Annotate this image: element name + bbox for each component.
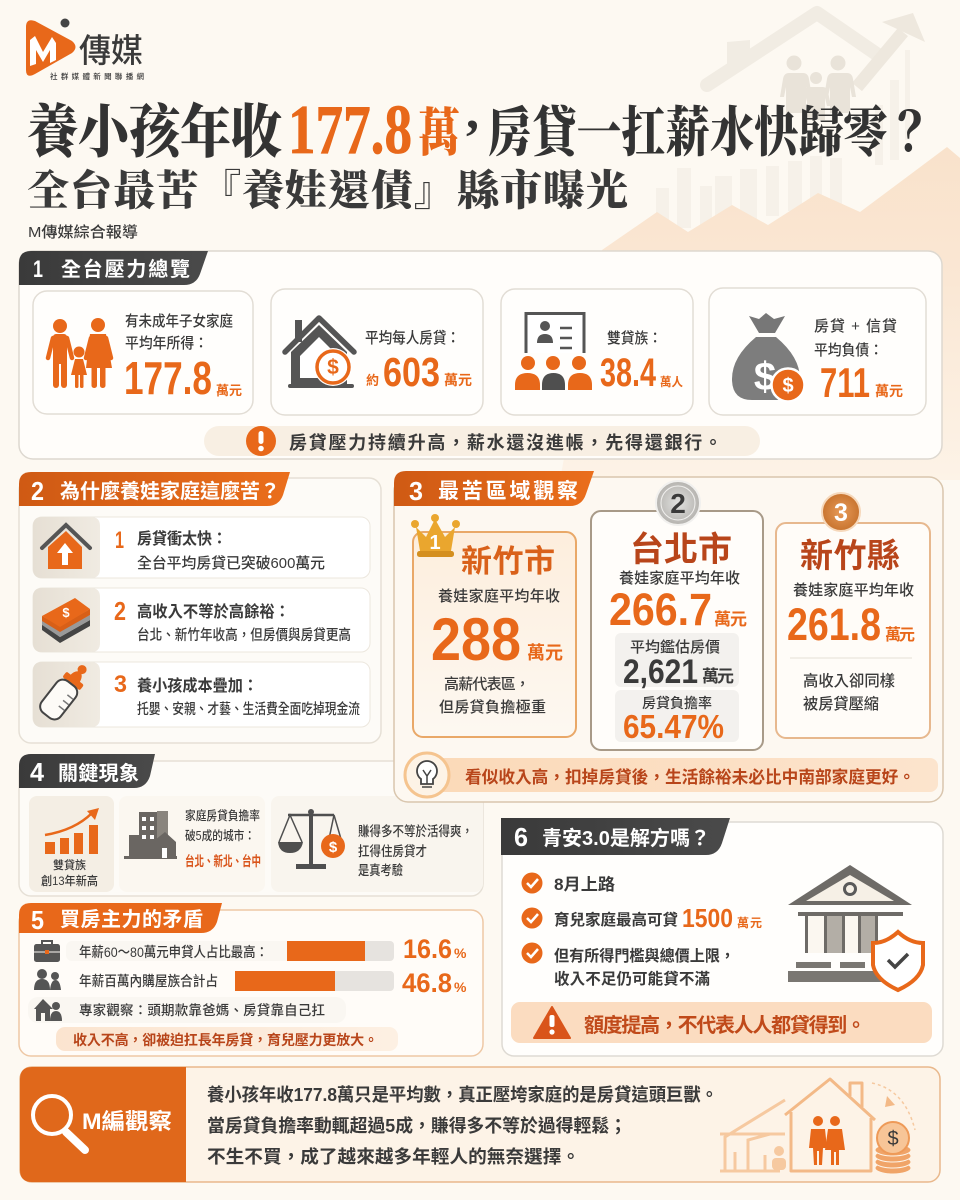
- stat text: 平均負債：: [814, 342, 883, 359]
- panel 3: 最苦區域觀察: [394, 471, 943, 802]
- title: 養小孩年收: [27, 100, 282, 165]
- panel 6: 青安3.0是解方嗎: [501, 818, 943, 1056]
- stat card: total debt: [709, 288, 926, 415]
- heading 2: [19, 472, 290, 506]
- phenomenon: burden over 50%: 破5成的城市：: [185, 828, 255, 843]
- rank 1: 新竹市: 新竹市: [461, 544, 555, 579]
- average appraised price: 萬元: [702, 667, 734, 686]
- icon: rising bars: [45, 808, 99, 854]
- panel 4: 關鍵現象: [19, 754, 483, 896]
- rank 3: 新竹縣: 261.8: [787, 599, 881, 650]
- reason 2: [33, 588, 370, 652]
- label block with magnifier: [20, 1067, 186, 1182]
- checklist: 8月上路: [554, 875, 616, 894]
- reason 1: 房貸衝太快：: [137, 529, 227, 548]
- stat text: [600, 330, 683, 395]
- statistic row: 46.8%: 年薪百萬內購屋族合計占: [79, 973, 218, 989]
- mortgage burden rate: 房貸負擔率: [642, 695, 712, 711]
- statistic row: 16.6%: 16.6: [403, 934, 452, 964]
- rank 3: 新竹縣: 高收入卻同樣: [803, 672, 895, 690]
- icon: money bag: $: [782, 375, 794, 397]
- rank 2: 台北市: 萬元: [714, 610, 747, 629]
- statistic row: 46.8%: [34, 968, 467, 998]
- rank 3: 新竹縣: 養娃家庭平均年收: [793, 581, 914, 599]
- stat text: 雙貸族：: [607, 330, 662, 347]
- checklist: 育兒家庭最高可貸: [554, 910, 678, 929]
- statistic row: 16.6%: [34, 934, 467, 964]
- stat card: mortgage per person: [271, 289, 483, 415]
- heading 1: 1: [33, 256, 43, 283]
- commentary text: 不生不買，成了越來越多年輕人的無奈選擇。: [207, 1146, 580, 1167]
- title: 萬: [418, 105, 460, 163]
- reason 1: 全台平均房貸已突破600萬元: [137, 554, 325, 572]
- stat text: 平均年所得：: [125, 335, 208, 352]
- icon: board and people: [515, 314, 592, 390]
- rank 3: 新竹縣: [776, 493, 930, 738]
- phenomenon: burden over 50%: [119, 796, 265, 892]
- heading 2: 2: [31, 476, 44, 506]
- callout: lightbulb note: [405, 753, 938, 797]
- icon: baby bottle: [37, 659, 94, 723]
- rank 3: 新竹縣: 新竹縣: [800, 537, 900, 574]
- stat text: 平均每人房貸：: [365, 329, 460, 347]
- stat text: 萬元: [216, 383, 242, 398]
- stat text: [365, 329, 472, 395]
- logo: M傳媒: 傳媒: [79, 32, 143, 69]
- rank 1: 新竹市: 但房貸負擔極重: [439, 699, 546, 716]
- heading 4: 4: [30, 757, 45, 787]
- phenomenon: burden over 50%: 台北、新北、台中: [185, 853, 261, 869]
- icon: silver medal: [656, 481, 700, 525]
- rank 1: 新竹市: 高薪代表區，: [444, 675, 530, 693]
- subtitle: 全台最苦『養娃還債』縣市曝光: [27, 167, 628, 215]
- stat text: 萬人: [660, 375, 683, 389]
- phenomenon: dual-loan record: [29, 796, 114, 892]
- heading 5: 5: [31, 905, 44, 935]
- stat text: 萬元: [444, 372, 472, 388]
- icon: house with up arrow: [42, 525, 90, 569]
- icon: balance scale with coin: [278, 809, 345, 869]
- heading 6: 青安3.0是解方嗎？: [542, 826, 710, 850]
- title: ,: [466, 83, 479, 140]
- checklist: 收入不足仍可能貸不滿: [554, 969, 710, 988]
- icon: silver medal: 2: [670, 488, 686, 519]
- rank 3: 新竹縣: 萬元: [885, 626, 915, 644]
- stat text: 有未成年子女家庭: [125, 312, 233, 330]
- icon: bank with shield: [788, 865, 923, 990]
- icon: stack of cash: [42, 598, 90, 643]
- panel 5: 買房主力的矛盾: [19, 903, 483, 1056]
- icon: gold crown: 1: [429, 532, 441, 554]
- icon: city buildings: [124, 811, 177, 859]
- background illustration: house, family, rising arrow and chart: [560, 13, 960, 480]
- statistic row: 16.6%: 年薪60～80萬元申貸人占比最高：: [79, 944, 268, 960]
- rank 3: 新竹縣: 被房貸壓縮: [803, 695, 879, 713]
- label block with magnifier: M編觀察: [82, 1109, 172, 1134]
- callout: child-rearing pressure: [56, 1027, 398, 1051]
- icon: two people: [34, 969, 61, 990]
- checklist: 但有所得門檻與總價上限，: [554, 946, 735, 965]
- stat text: 603: [383, 349, 440, 395]
- mortgage burden rate: 65.47%: [623, 708, 724, 745]
- icon: balance scale with coin: $: [329, 839, 338, 856]
- expert note row: [28, 997, 346, 1023]
- phenomenon: burden over 50%: 家庭房貸負擔率: [185, 808, 260, 823]
- heading 1: 全台壓力總覽: [61, 257, 190, 281]
- stat text: 38.4: [600, 351, 657, 395]
- icon: house with coin: $: [327, 356, 339, 379]
- reason 3: 養小孩成本疊加：: [137, 676, 258, 695]
- callout: child-rearing pressure: 收入不高，卻被迫扛長年房貸，育兒壓力更放大。: [73, 1032, 378, 1048]
- panel 2: 為什麼養娃家庭這麼苦: [19, 472, 381, 743]
- logo: M傳媒: 社群媒體新聞聯播網: [50, 71, 144, 81]
- title: 177.8: [288, 92, 412, 169]
- phenomenon: earnings vs life: 扛得住房貸才: [358, 843, 427, 859]
- stat card: family income: [33, 291, 253, 414]
- checklist: 萬元: [737, 916, 762, 930]
- checklist: [522, 872, 762, 988]
- callout: mortgage pressure: [204, 426, 760, 456]
- icon: bronze medal: [822, 493, 860, 531]
- statistic row: 46.8%: 46.8: [402, 968, 452, 998]
- callout: lightbulb note: 看似收入高，扣掉房貸後，生活餘裕未必比中南部家庭更好。: [465, 767, 915, 787]
- rank 2: 台北市: 養娃家庭平均年收: [619, 569, 740, 587]
- statistic row: 46.8%: %: [454, 979, 467, 995]
- average appraised price: 2,621: [623, 653, 698, 691]
- icon: money bag: $: [754, 355, 776, 399]
- panel 1: 全台壓力總覽: [19, 251, 942, 459]
- phenomenon: earnings vs life: 是真考驗: [358, 862, 403, 878]
- rank 2: 台北市: 266.7: [609, 584, 712, 635]
- checklist: 1500: [682, 903, 733, 933]
- rank 1: 新竹市: [411, 514, 576, 737]
- reason 2: 台北、新竹年收高，但房價與房貸更高: [137, 626, 351, 644]
- heading 4: [19, 754, 155, 788]
- reason 1: 1: [115, 527, 124, 554]
- stat text: 711: [820, 359, 870, 406]
- expert note row: 專家觀察：頭期款靠爸媽、房貸靠自己扛: [79, 1002, 325, 1018]
- stat text: [124, 312, 242, 404]
- icon: briefcase: [34, 941, 60, 962]
- rank 1: 新竹市: 288: [431, 606, 521, 673]
- statistic row: 16.6%: %: [454, 945, 467, 961]
- heading 6: [501, 818, 730, 855]
- stat card: dual-loan group: [501, 289, 693, 415]
- reason 3: 3: [114, 671, 127, 698]
- phenomenon: earnings vs life: [271, 796, 483, 892]
- reason 2: 高收入不等於高餘裕：: [137, 602, 290, 621]
- heading 3: [394, 471, 594, 506]
- stat text: 房貸 + 信貸: [814, 318, 897, 335]
- panel: M編觀察: [20, 1067, 940, 1182]
- icon: stack of cash: $: [62, 605, 70, 620]
- reason 3: 托嬰、安親、才藝、生活費全面吃掉現金流: [137, 700, 360, 718]
- heading 3: 3: [409, 476, 423, 506]
- logo: M傳媒: [26, 18, 144, 81]
- heading 3: 最苦區域觀察: [438, 480, 578, 503]
- mortgage burden rate: [615, 690, 739, 745]
- title: [27, 83, 932, 169]
- icon: family: [48, 318, 112, 388]
- commentary text: [207, 1084, 718, 1167]
- stat text: 177.8: [124, 352, 212, 404]
- heading 1: [19, 251, 208, 285]
- commentary text: 養小孩年收177.8萬只是平均數，真正壓垮家庭的是房貸這頭巨獸。: [207, 1084, 718, 1105]
- reason 2: 2: [114, 596, 126, 626]
- commentary text: 當房貸負擔率動輒超過5成，賺得多不等於過得輕鬆；: [207, 1115, 627, 1136]
- reason 3: [33, 659, 370, 727]
- phenomenon: dual-loan record: 雙貸族: [53, 858, 86, 872]
- heading 2: 為什麼養娃家庭這麼苦？: [60, 479, 280, 503]
- callout: mortgage pressure: 房貸壓力持續升高，薪水還沒進帳，先得還銀行。: [289, 432, 722, 453]
- average appraised price: [615, 633, 739, 691]
- stat text: 萬元: [875, 383, 903, 399]
- heading 6: 6: [514, 822, 528, 852]
- rank 2: 台北市: [591, 481, 763, 750]
- stat text: 約: [366, 373, 379, 388]
- illustration: houses, couple and coins: $: [887, 1128, 899, 1150]
- stat text: [814, 318, 903, 406]
- icon: money bag: [732, 313, 804, 402]
- byline: M傳媒綜合報導: [28, 223, 138, 241]
- rank 1: 新竹市: 萬元: [527, 643, 563, 663]
- average appraised price: 平均鑑估房價: [630, 639, 720, 656]
- reason 1: [33, 517, 370, 578]
- heading 5: [19, 903, 222, 935]
- icon: gold crown: [411, 514, 460, 557]
- callout: warning: 額度提高，不代表人人都貸得到。: [584, 1013, 866, 1037]
- phenomenon: dual-loan record: 創13年新高: [41, 873, 98, 888]
- heading 4: 關鍵現象: [58, 761, 139, 785]
- rank 2: 台北市: 台北市: [630, 531, 732, 569]
- icon: house and person: [34, 999, 62, 1021]
- illustration: houses, couple and coins: [720, 1079, 915, 1174]
- icon: house with coin: [285, 318, 354, 388]
- rank 1: 新竹市: 養娃家庭平均年收: [438, 587, 560, 605]
- phenomenon: earnings vs life: 賺得多不等於活得爽，: [358, 823, 473, 839]
- heading 5: 買房主力的矛盾: [60, 908, 203, 931]
- icon: bronze medal: 3: [834, 499, 848, 527]
- callout: warning: [511, 1002, 932, 1043]
